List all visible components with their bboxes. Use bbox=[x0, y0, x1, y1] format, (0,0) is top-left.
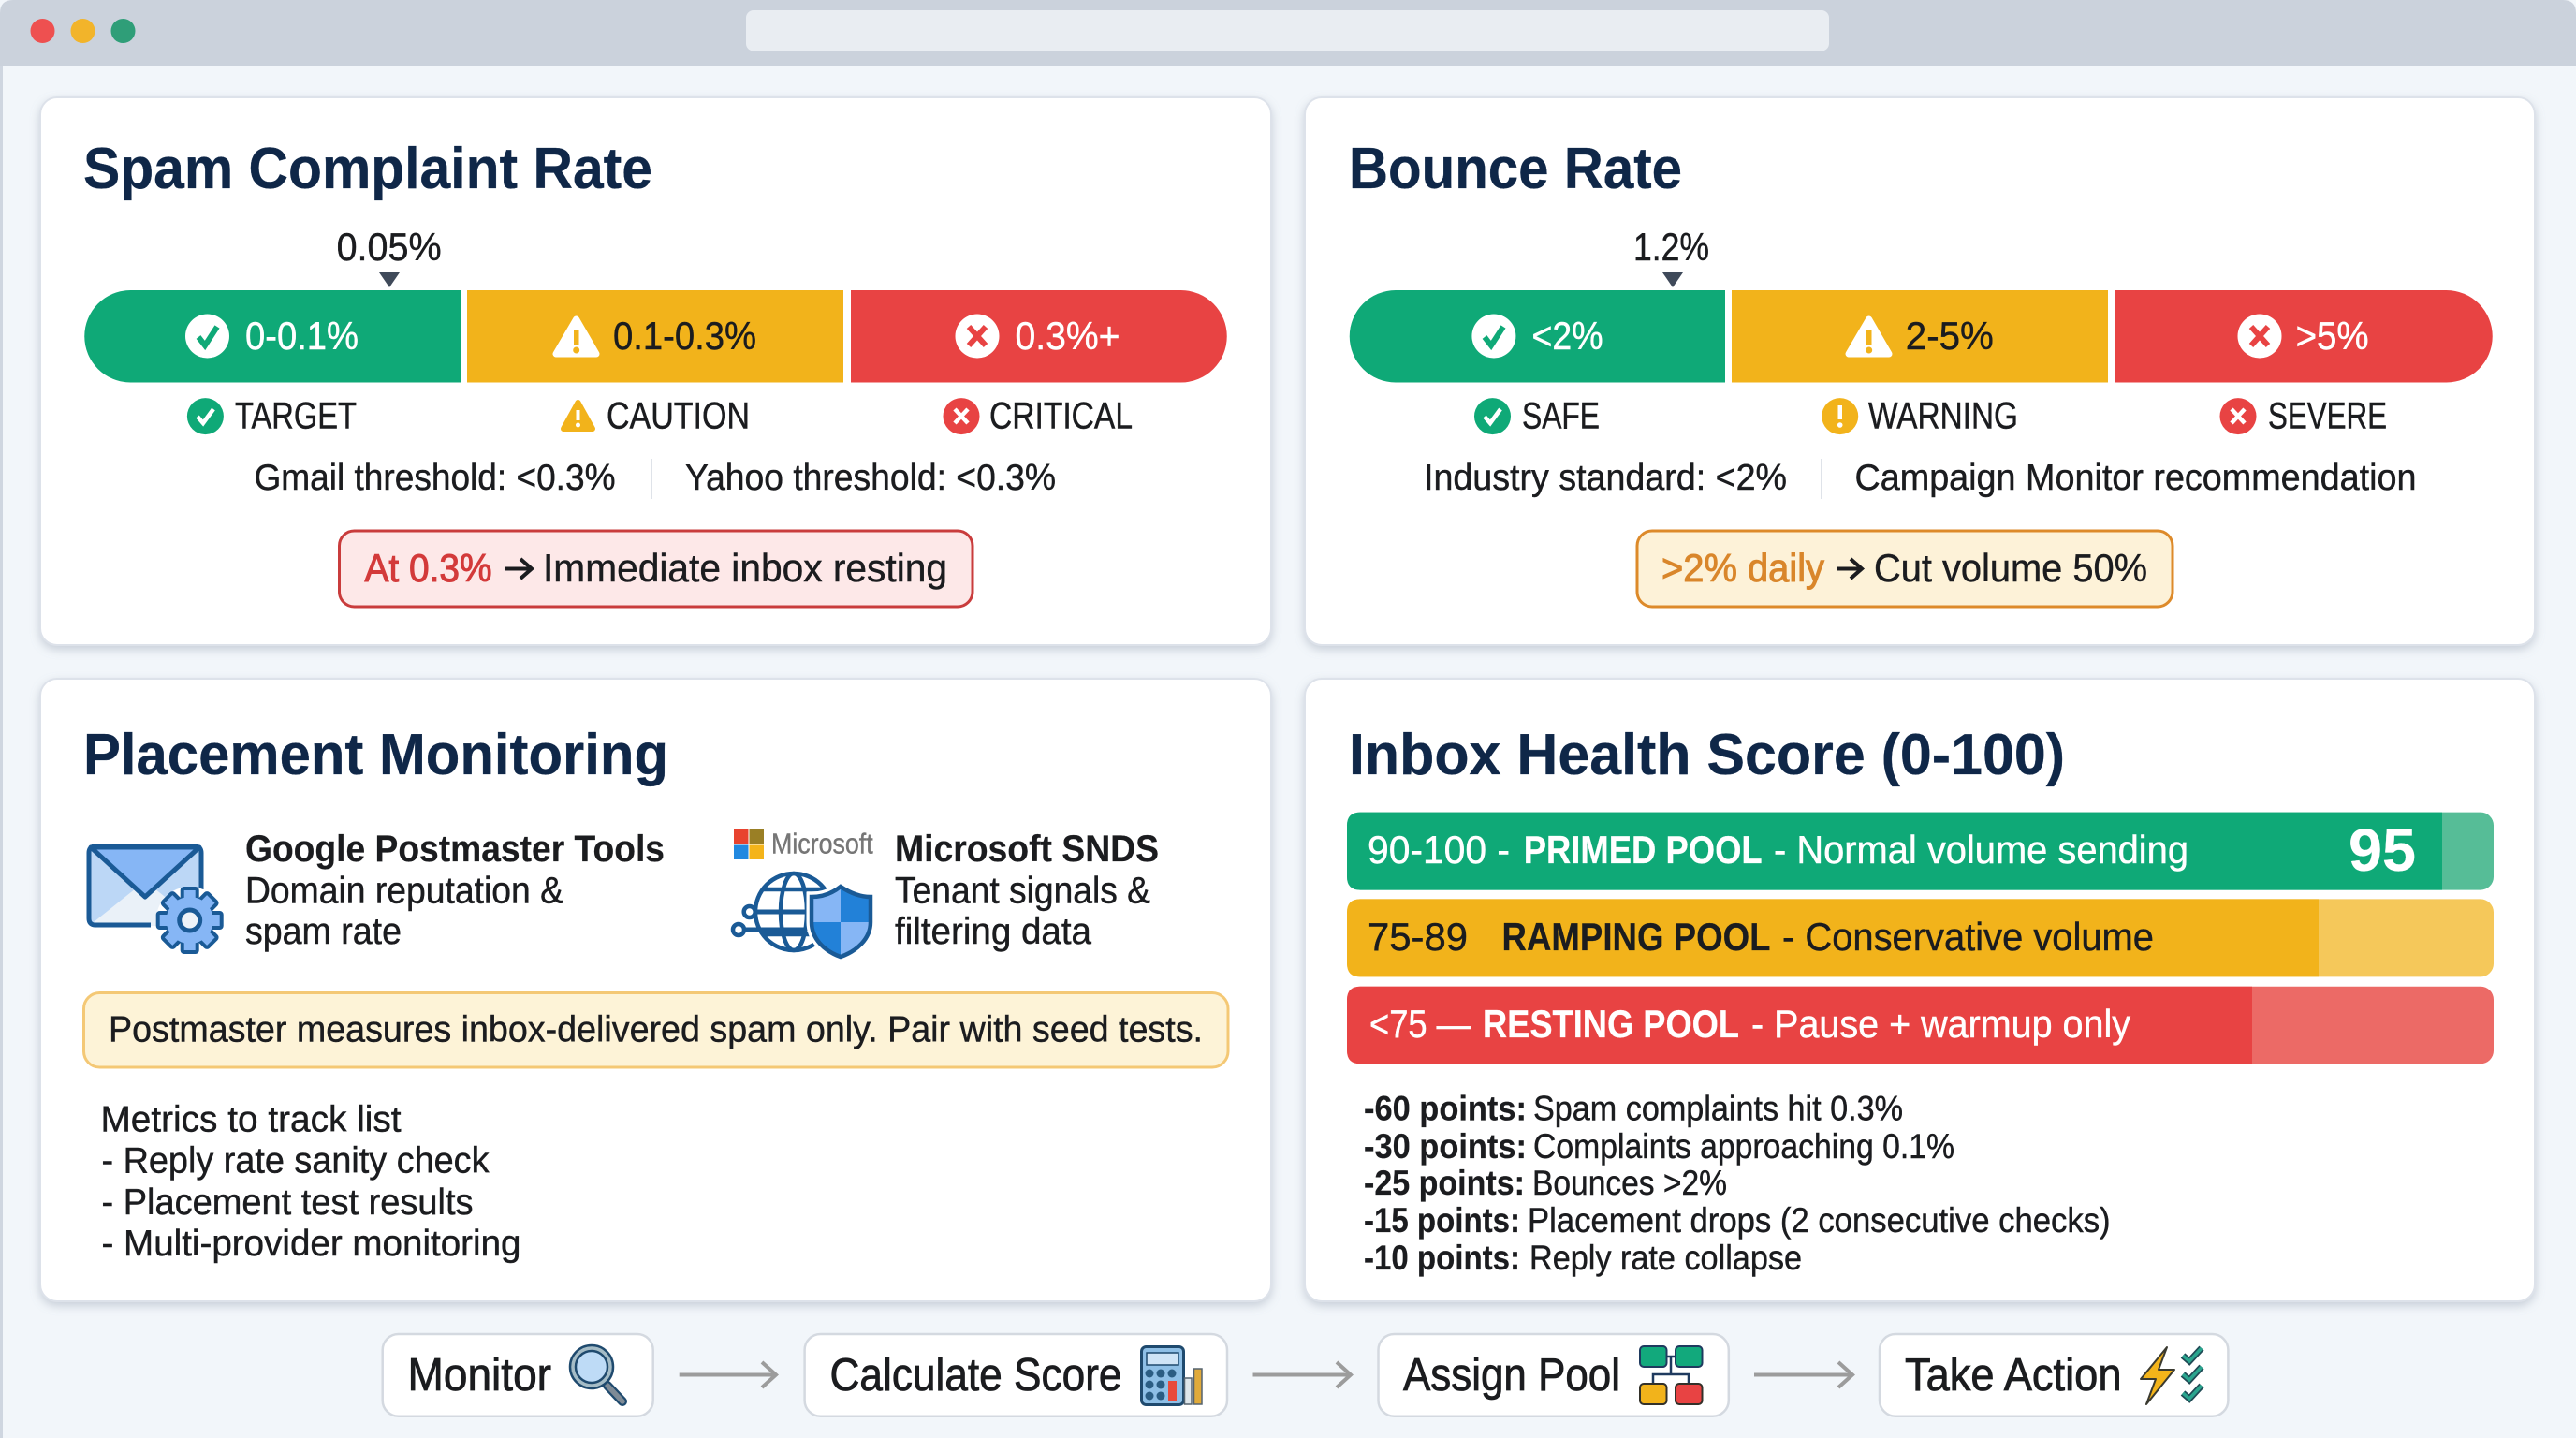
icon: globe with shield bbox=[733, 873, 876, 960]
flow step: assign pool: Assign Pool bbox=[1403, 1350, 1620, 1401]
window control: amber bbox=[71, 19, 95, 43]
provider thresholds: Yahoo threshold: <0.3% bbox=[685, 458, 1056, 498]
microsoft snds text bbox=[895, 829, 1159, 952]
google postmaster text: Domain reputation & bbox=[245, 871, 564, 912]
penalty list: Reply rate collapse bbox=[1530, 1239, 1802, 1277]
icon: microsoft logo: Microsoft bbox=[771, 828, 873, 860]
panel: spam complaint rate bbox=[40, 97, 1271, 645]
threshold bar: <2% bbox=[1531, 314, 1603, 358]
score bar: resting pool: RESTING POOL bbox=[1483, 1002, 1739, 1046]
score bar: ramping pool: RAMPING POOL bbox=[1501, 915, 1771, 959]
penalty list: Placement drops (2 consecutive checks) bbox=[1528, 1201, 2111, 1240]
window control: green bbox=[110, 19, 135, 43]
icon: cross bbox=[955, 315, 1000, 358]
flow step: take action bbox=[1880, 1334, 2228, 1416]
marker value bbox=[337, 225, 442, 287]
score bar: primed pool: - Normal volume sending bbox=[1774, 828, 2188, 872]
icon: magnifier bbox=[570, 1345, 622, 1401]
google postmaster text: spam rate bbox=[245, 911, 402, 952]
threshold bar: >5% bbox=[2296, 314, 2369, 358]
heading: Spam Complaint Rate bbox=[83, 137, 652, 201]
legend row bbox=[187, 395, 1133, 436]
icon: cross bbox=[2237, 315, 2282, 358]
legend row: CRITICAL bbox=[989, 395, 1133, 436]
icon: warning bbox=[1849, 319, 1889, 354]
penalty list: Complaints approaching 0.1% bbox=[1533, 1127, 1954, 1166]
penalty list bbox=[1364, 1090, 2111, 1277]
icon: microsoft logo bbox=[734, 828, 873, 860]
window control: red bbox=[30, 19, 54, 43]
icon: envelope with gear bbox=[89, 846, 224, 954]
score bar: ramping pool: - Conservative volume bbox=[1782, 915, 2154, 959]
callout note bbox=[84, 992, 1228, 1067]
marker value: 1.2% bbox=[1633, 225, 1709, 269]
score bar: primed pool: PRIMED POOL bbox=[1524, 828, 1763, 872]
flow step: calculate score: Calculate Score bbox=[829, 1350, 1121, 1401]
marker value: 0.05% bbox=[337, 225, 442, 269]
standards: Industry standard: <2% bbox=[1424, 458, 1787, 498]
panel: bounce rate bbox=[1305, 97, 2535, 645]
legend row: CAUTION bbox=[607, 395, 750, 436]
microsoft snds text: filtering data bbox=[895, 911, 1092, 952]
icon: check bbox=[1471, 315, 1515, 358]
heading: Placement Monitoring bbox=[83, 723, 668, 787]
browser title bar bbox=[0, 0, 2576, 66]
legend row: SAFE bbox=[1522, 395, 1600, 436]
threshold bar: 2-5% bbox=[1906, 314, 1994, 358]
arrow bbox=[1754, 1362, 1852, 1387]
provider thresholds bbox=[255, 458, 1056, 499]
threshold bar bbox=[84, 290, 1227, 382]
metrics list: - Multi-provider monitoring bbox=[101, 1224, 520, 1264]
score bar: primed pool: 95 bbox=[2349, 816, 2416, 884]
google postmaster text bbox=[245, 829, 665, 952]
flow step: monitor bbox=[383, 1334, 653, 1416]
standards bbox=[1424, 458, 2417, 499]
legend row bbox=[1474, 395, 2387, 436]
google postmaster text: Google Postmaster Tools bbox=[245, 829, 665, 870]
icon: lightning and checks bbox=[2141, 1347, 2202, 1404]
threshold bar bbox=[1350, 290, 2493, 382]
score bar: resting pool: <75 — bbox=[1369, 1002, 1471, 1046]
score bar: resting pool bbox=[1347, 987, 2494, 1064]
threshold bar: 0.1-0.3% bbox=[613, 314, 756, 358]
callout: At 0.3% bbox=[365, 546, 492, 590]
heading: Inbox Health Score (0-100) bbox=[1349, 723, 2065, 787]
threshold bar: 0-0.1% bbox=[245, 314, 359, 358]
penalty list: -25 points: bbox=[1364, 1164, 1525, 1202]
callout bbox=[339, 531, 973, 607]
penalty list: -60 points: bbox=[1364, 1090, 1527, 1128]
score bar: primed pool bbox=[1347, 813, 2494, 890]
metrics list: - Placement test results bbox=[101, 1182, 474, 1223]
callout: Cut volume 50% bbox=[1874, 546, 2147, 590]
penalty list: -10 points: bbox=[1364, 1239, 1520, 1277]
penalty list: Bounces >2% bbox=[1532, 1164, 1727, 1202]
microsoft snds text: Tenant signals & bbox=[895, 871, 1150, 912]
heading: Bounce Rate bbox=[1349, 137, 1682, 201]
metrics list: - Reply rate sanity check bbox=[101, 1140, 490, 1181]
callout: >2% daily bbox=[1661, 546, 1824, 590]
score bar: resting pool: - Pause + warmup only bbox=[1751, 1002, 2130, 1046]
threshold bar: 0.3%+ bbox=[1015, 314, 1120, 358]
icon: check bbox=[185, 315, 229, 358]
legend row: SEVERE bbox=[2268, 395, 2387, 436]
score bar: ramping pool bbox=[1347, 899, 2494, 976]
microsoft snds text: Microsoft SNDS bbox=[895, 829, 1159, 870]
penalty list: -15 points: bbox=[1364, 1201, 1520, 1240]
legend row: WARNING bbox=[1868, 395, 2018, 436]
panel: inbox health score bbox=[1305, 679, 2535, 1301]
metrics list: Metrics to track list bbox=[101, 1100, 402, 1140]
address bar bbox=[746, 10, 1829, 51]
penalty list: -30 points: bbox=[1364, 1127, 1527, 1166]
callout note: Postmaster measures inbox-delivered spam only. Pair with seed tests. bbox=[109, 1010, 1203, 1050]
standards: Campaign Monitor recommendation bbox=[1855, 458, 2417, 498]
callout bbox=[1637, 531, 2173, 607]
score bar: ramping pool: 75-89 bbox=[1368, 915, 1468, 959]
arrow bbox=[1252, 1362, 1351, 1387]
callout: Immediate inbox resting bbox=[543, 546, 947, 590]
marker value bbox=[1633, 225, 1709, 287]
icon: calculator bbox=[1142, 1346, 1202, 1404]
penalty list: Spam complaints hit 0.3% bbox=[1533, 1090, 1903, 1128]
score bar: primed pool: 90-100 - bbox=[1368, 828, 1510, 872]
flow step: monitor: Monitor bbox=[408, 1350, 551, 1401]
arrow bbox=[680, 1362, 776, 1387]
legend row: TARGET bbox=[235, 395, 357, 436]
provider thresholds: Gmail threshold: <0.3% bbox=[255, 458, 616, 498]
metrics list bbox=[101, 1100, 520, 1264]
icon: pool hierarchy bbox=[1640, 1346, 1702, 1404]
flow step: calculate score bbox=[805, 1334, 1227, 1416]
flow step: take action: Take Action bbox=[1905, 1350, 2121, 1401]
icon: warning bbox=[556, 319, 596, 354]
flow step: assign pool bbox=[1378, 1334, 1729, 1416]
panel: placement monitoring bbox=[40, 679, 1271, 1301]
